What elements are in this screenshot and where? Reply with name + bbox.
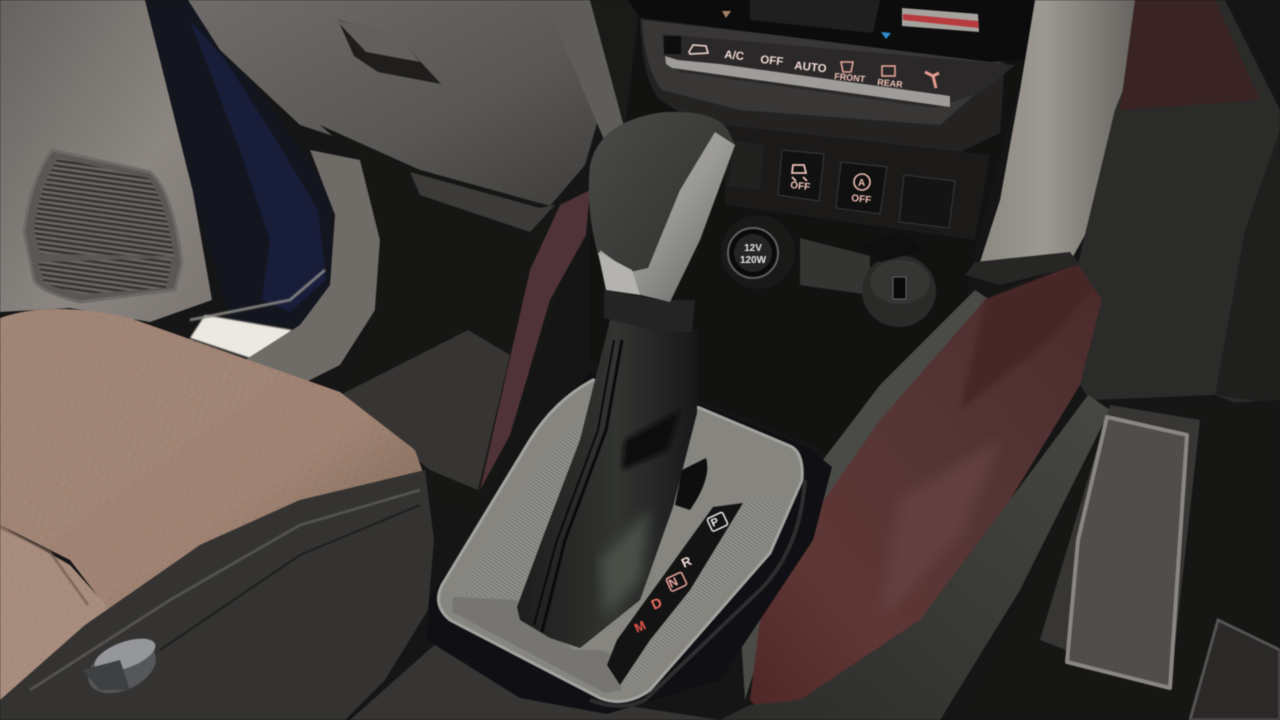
icon: floor mat [1190,620,1280,720]
icon: seat airflow [925,72,939,88]
panel: gate surface [670,427,787,513]
panel: gear surround [427,372,832,714]
icon: vent slot [664,36,681,54]
icon: brake pedal [1067,417,1187,688]
panel: silver pillar [965,0,1160,285]
panel: maroon console side right [750,265,1102,708]
panel: footwell [320,125,590,520]
climate label: FRONT: FRONT [834,71,866,84]
panel: seat side bolster [0,470,434,720]
icon: front demister [841,62,853,72]
panel: display surround [628,0,1045,62]
icon: door speaker grille [24,150,182,302]
icon: gear indicator strip: R [679,553,694,571]
icon: blank switch left [729,141,764,190]
icon: 12V socket: 120W [740,255,767,266]
panel: chrome rim [590,480,805,706]
icon: gear indicator strip: D [649,594,664,613]
icon: climate buttons bar [665,56,950,107]
icon: traction control off switch: OFF [790,180,811,193]
icon: gate slot [675,458,707,510]
panel: mesh left of boot [457,412,600,600]
icon: traction control off switch [778,150,824,201]
panel: seat cushion [0,309,425,700]
icon: gear knob [589,112,735,332]
icon: auto stop off switch: A [858,178,865,189]
panel: climate control unit [628,0,1045,152]
icon: 12V socket: 12V [744,243,762,254]
climate label: OFF: OFF [760,54,784,68]
icon: blue indicator [881,32,891,39]
icon: seat adjuster knob [80,632,164,703]
icon: gear indicator strip: M [632,618,648,636]
panel: silver console strip [740,290,990,700]
panel: console floor [350,640,720,720]
climate label: REAR: REAR [877,77,904,90]
icon: gear indicator strip [607,503,743,685]
icon: auto stop off switch: OFF [851,193,872,206]
icon: recirculation car [689,45,708,54]
panel: screen [750,0,880,33]
panel: maroon console side left [480,190,590,490]
icon: gear lever boot [517,320,697,648]
panel: mesh right of gate [622,502,782,687]
panel: upper console dark [590,0,1045,470]
panel: switch bank [725,125,990,240]
icon: 12V socket [721,215,795,289]
icon: selector marker [722,11,731,18]
icon: gear indicator strip: N [666,574,680,591]
icon: blank switch right [899,175,955,228]
panel: dashboard lower trim [188,0,650,206]
panel: USB housing [800,232,936,327]
icon: rear demister [882,66,895,76]
icon: gear indicator strip: P [709,516,721,530]
panel: lower right console and footwell [720,395,1280,720]
icon: auto stop off switch [836,162,887,214]
climate label: A/C: A/C [724,49,745,63]
icon: hazard switch [902,8,979,32]
panel: right kick panel [1078,0,1280,420]
panel: door trim [0,0,380,385]
climate label: AUTO: AUTO [794,60,827,75]
